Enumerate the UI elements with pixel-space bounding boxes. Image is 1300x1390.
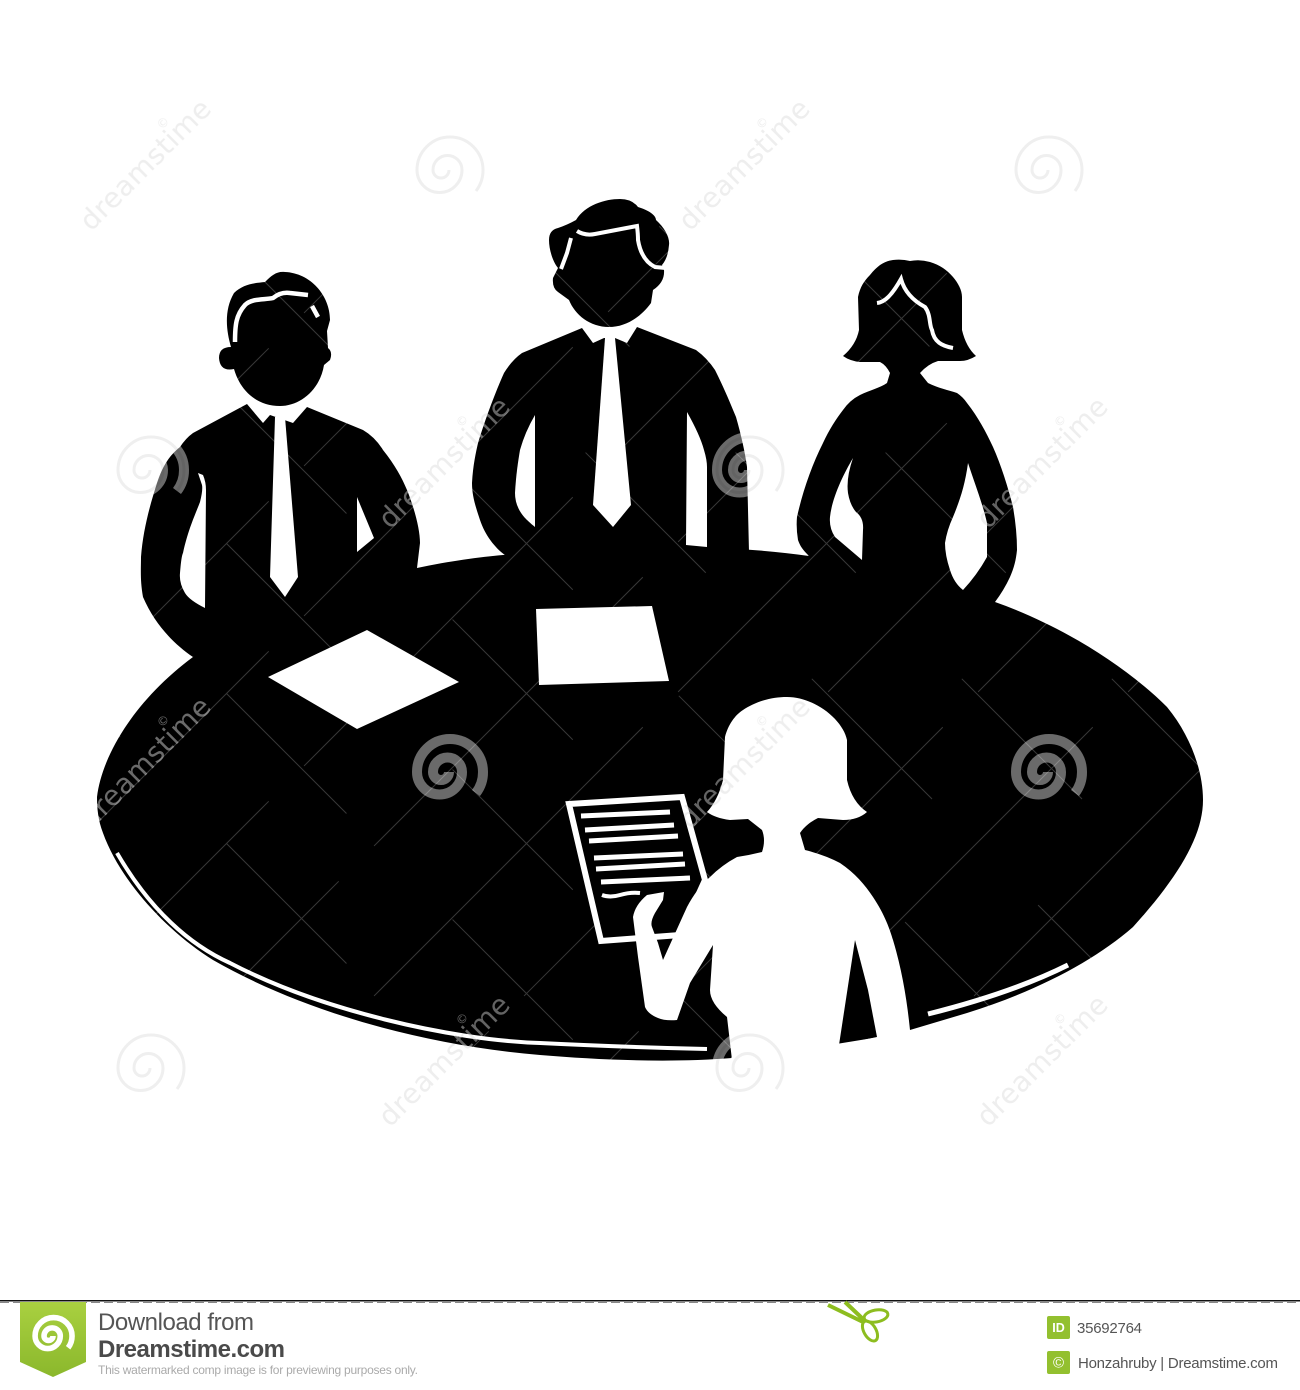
woman left arm gap	[830, 458, 863, 560]
table	[97, 547, 1203, 1061]
left man right arm gap	[357, 497, 374, 552]
watermark marks on white: dreamstime	[372, 988, 517, 1133]
watermark spirals and words on black: dreamstime	[372, 390, 517, 535]
figure: left man	[141, 272, 420, 657]
icon: copyright badge	[1047, 1351, 1070, 1374]
watermark marks on white: ©	[453, 412, 471, 430]
download text: Download from	[98, 1309, 254, 1336]
watermark marks on white: ©	[753, 114, 771, 132]
watermark spirals and words on black: ©	[453, 412, 471, 430]
watermark spirals and words on black: ©	[154, 712, 172, 730]
watermark marks on white: ©	[1051, 412, 1069, 430]
icon: ID badge: ID	[1052, 1321, 1065, 1335]
figure: center man	[472, 199, 749, 575]
disclaimer text: This watermarked comp image is for previewing purposes only.	[98, 1363, 418, 1377]
credit text: Honzahruby | Dreamstime.com	[1078, 1355, 1278, 1372]
left man body	[141, 404, 420, 657]
icon: scissors	[828, 1302, 889, 1344]
lower white cut-out	[732, 1032, 930, 1075]
paper center	[536, 606, 669, 685]
figure: standing woman	[797, 260, 1017, 602]
brand text: Dreamstime.com	[98, 1336, 285, 1363]
icon: ID badge	[1047, 1316, 1070, 1339]
watermark marks on white: ©	[453, 1010, 471, 1028]
watermark spirals and words on black: ©	[1051, 412, 1069, 430]
watermark spirals and words on black: ©	[453, 1010, 471, 1028]
watermark marks on white	[68, 87, 1115, 1133]
footer	[0, 1300, 1300, 1377]
left man left arm gap	[180, 473, 206, 608]
left man tie	[270, 417, 298, 597]
watermark spirals and words on black: dreamstime	[372, 988, 517, 1133]
watermark spirals and words on black: dreamstime	[73, 690, 218, 835]
woman hair highlight	[877, 279, 953, 348]
watermark marks on white: ©	[154, 114, 172, 132]
paper left	[268, 630, 459, 729]
left man head	[219, 272, 331, 406]
watermark spirals and words on black: dreamstime	[970, 390, 1115, 535]
center man body	[472, 327, 749, 575]
center man left arm gap	[515, 415, 535, 527]
woman silhouette	[797, 260, 1017, 602]
center man right arm gap	[686, 412, 707, 547]
watermark spirals and words on black	[68, 385, 1115, 1133]
woman right arm gap	[945, 463, 987, 590]
watermark marks on white: dreamstime	[73, 92, 218, 237]
figure: seated woman with document	[569, 697, 930, 1075]
icon: green ribbon logo	[20, 1302, 86, 1377]
table rim highlight right	[928, 965, 1068, 1014]
seated woman silhouette	[633, 697, 910, 1066]
watermark marks on white: dreamstime	[372, 390, 517, 535]
document text lines	[581, 812, 690, 896]
icon: copyright badge: ©	[1053, 1354, 1064, 1372]
left man hair highlight	[235, 293, 318, 342]
center man tie	[593, 338, 631, 527]
watermark marks on white: dreamstime	[672, 92, 817, 237]
document	[569, 797, 705, 941]
image ID number: 35692764	[1077, 1320, 1142, 1337]
watermark marks on white: dreamstime	[970, 988, 1115, 1133]
table rim highlight left	[117, 853, 707, 1049]
watermark marks on white: dreamstime	[672, 690, 817, 835]
seated woman arm shadow	[839, 940, 877, 1045]
watermark marks on white: ©	[753, 712, 771, 730]
watermark spirals and words on black: dreamstime	[672, 690, 817, 835]
watermark spirals and words on black: ©	[753, 712, 771, 730]
center man hair highlight	[561, 226, 666, 269]
watermark marks on white: ©	[1051, 1010, 1069, 1028]
watermark marks on white: dreamstime	[970, 390, 1115, 535]
footer separator	[0, 1300, 1300, 1302]
center man head	[549, 199, 669, 327]
